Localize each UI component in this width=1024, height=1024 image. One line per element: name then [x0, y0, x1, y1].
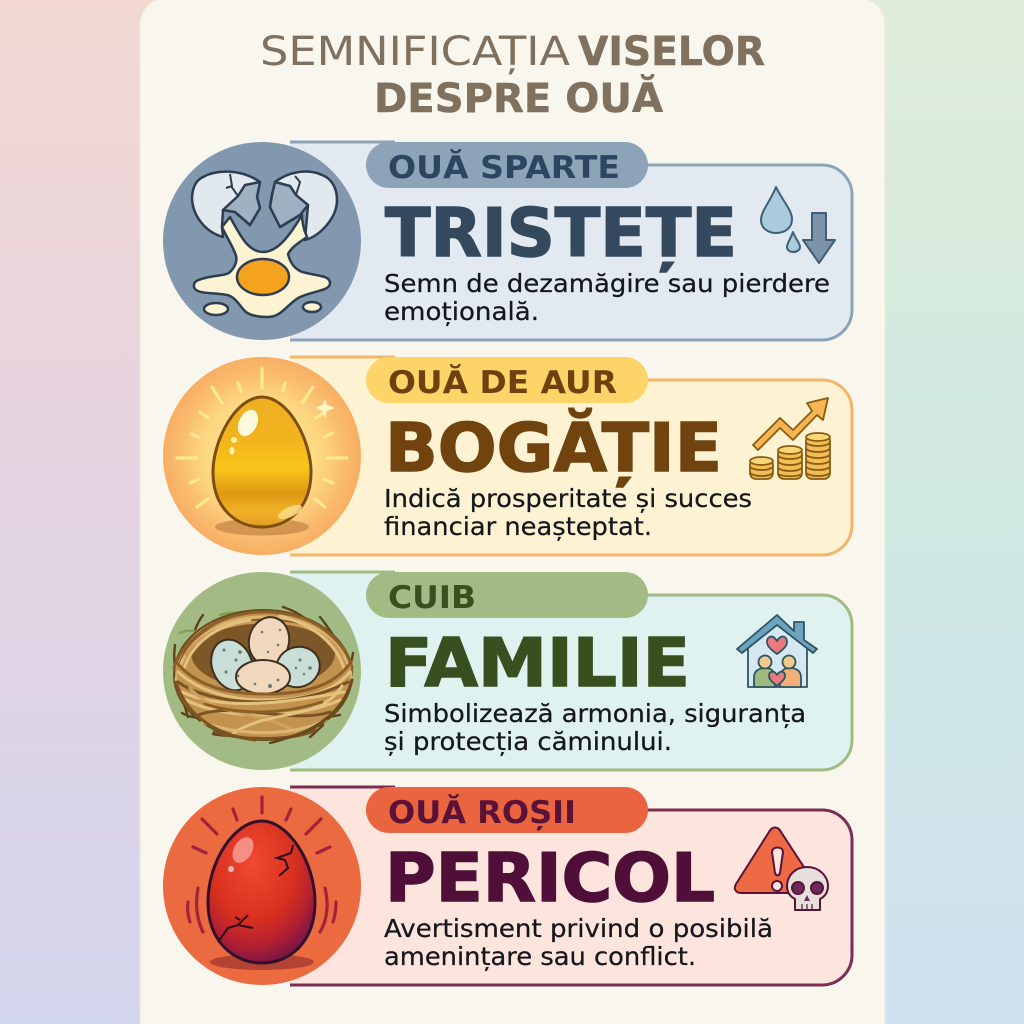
- title: SEMNIFICAȚIA: [260, 29, 571, 75]
- panel background: [290, 787, 852, 985]
- icon: family home: [737, 615, 817, 687]
- main card: [140, 0, 885, 1024]
- pill label: [366, 142, 648, 188]
- twigs: [174, 607, 353, 743]
- description: Avertisment privind o posibilă: [384, 914, 773, 943]
- description: amenințare sau conflict.: [384, 942, 696, 971]
- description: [384, 484, 752, 541]
- description: emoțională.: [384, 297, 539, 326]
- panel: tristete: OUĂ SPARTE: [388, 149, 620, 186]
- description: [384, 699, 806, 756]
- illustration: red egg: [188, 797, 336, 970]
- panel background: [290, 572, 852, 770]
- description: [384, 269, 830, 326]
- circle badge: [163, 142, 361, 340]
- pill label: [366, 357, 648, 403]
- description: Simbolizează armonia, siguranța: [384, 699, 806, 728]
- heading: TRISTEȚE: [385, 194, 737, 272]
- title: [260, 29, 765, 122]
- illustration: nest with eggs: [174, 607, 353, 743]
- panel: familie: [163, 572, 852, 770]
- icon: rising chart and coins: [750, 398, 830, 479]
- panel background: [290, 357, 852, 555]
- icon: tears and down arrow: [761, 187, 835, 263]
- circle badge: [163, 787, 361, 985]
- panel: tristete: [163, 142, 852, 340]
- description: și protecția căminului.: [384, 727, 672, 756]
- panel: bogatie: [163, 357, 852, 555]
- title: VISELOR: [578, 29, 765, 75]
- icon: warning triangle and skull: [735, 828, 828, 910]
- panel: bogatie: OUĂ DE AUR: [388, 364, 617, 401]
- heading: PERICOL: [385, 839, 715, 917]
- circle badge: [163, 572, 361, 770]
- pill label: [366, 787, 648, 833]
- eggs: [204, 613, 326, 696]
- description: [384, 914, 773, 971]
- title: DESPRE OUĂ: [374, 73, 663, 122]
- pill label: [366, 572, 648, 618]
- back rim strands: [174, 612, 352, 680]
- description: Semn de dezamăgire sau pierdere: [384, 269, 830, 298]
- panel: familie: CUIB: [388, 580, 476, 616]
- panel: pericol: OUĂ ROȘII: [388, 794, 576, 831]
- description: financiar neașteptat.: [384, 512, 652, 541]
- front weave: [176, 660, 351, 740]
- circle badge: [163, 357, 361, 555]
- heading: FAMILIE: [385, 624, 690, 702]
- panel background: [290, 142, 852, 340]
- heading: BOGĂȚIE: [385, 407, 722, 487]
- illustration: broken egg: [192, 171, 337, 317]
- illustration: golden egg: [177, 368, 347, 536]
- panel: pericol: [163, 787, 852, 985]
- description: Indică prosperitate și succes: [384, 484, 752, 513]
